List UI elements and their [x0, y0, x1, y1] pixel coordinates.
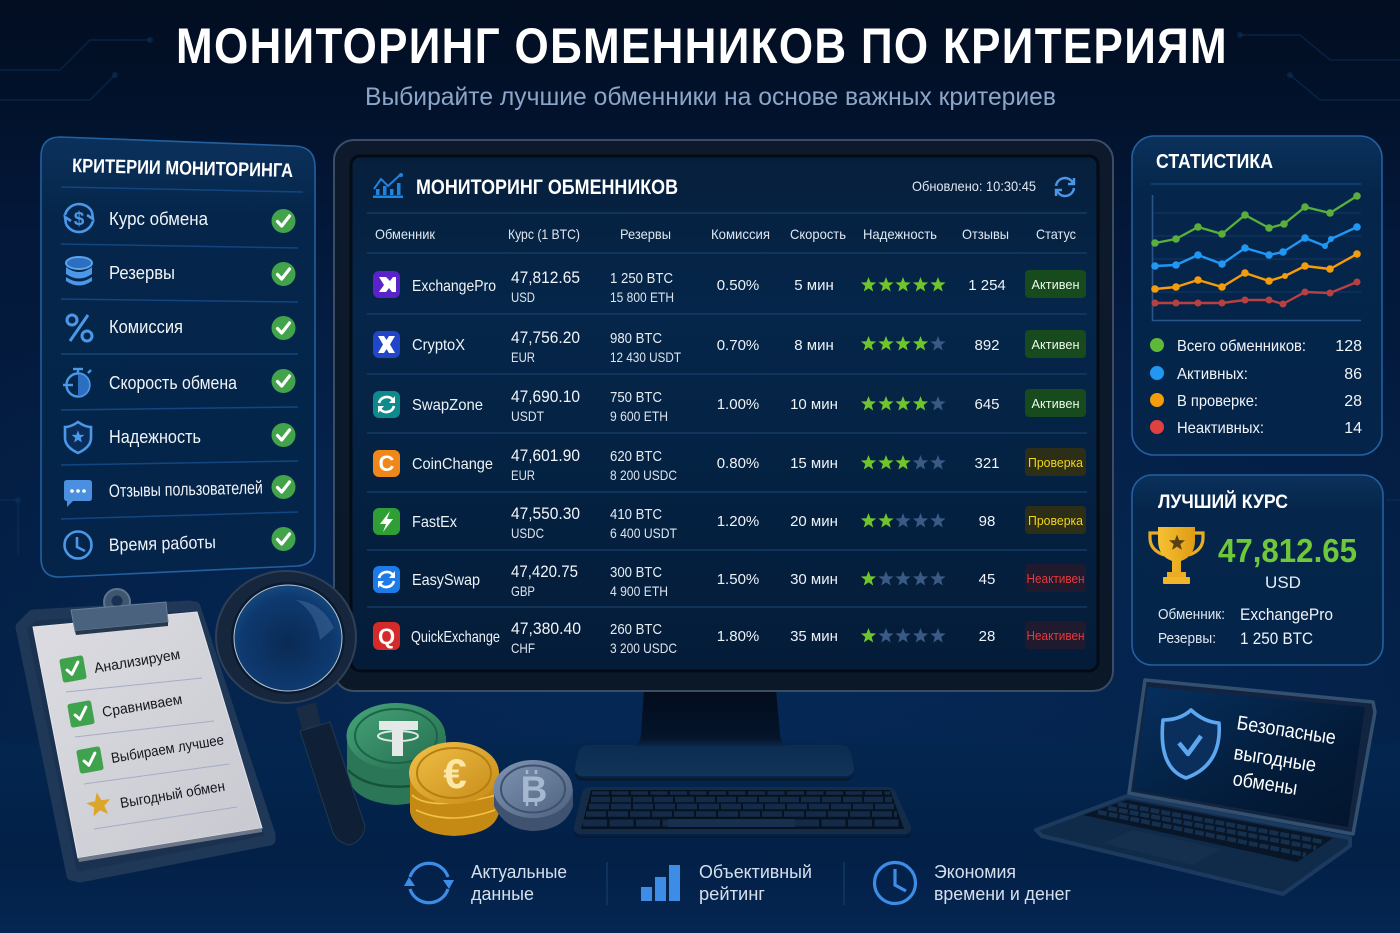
- panel: monitor dashboard: [334, 140, 1113, 691]
- row: QuickExchange: Q: [378, 624, 395, 649]
- footer: saving time and money: времени и денег: [934, 884, 1071, 904]
- heading: best rate: ЛУЧШИЙ КУРС: [1158, 491, 1288, 513]
- coin: bitcoin: B: [521, 769, 547, 810]
- table header: [375, 226, 1076, 242]
- legend: 28: [1344, 393, 1362, 410]
- icon: reserves: [66, 257, 92, 286]
- row: CryptoX: 47,756.20: [511, 328, 580, 347]
- coins: [346, 703, 573, 836]
- table header: Курс (1 BTC): [508, 226, 580, 242]
- row: CoinChange: 8 200 USDC: [610, 467, 677, 483]
- row: CryptoX: 980 BTC: [610, 331, 662, 347]
- row: CryptoX: CryptoX: [412, 337, 465, 354]
- icon: trophy: [1150, 527, 1203, 584]
- magnifying glass: [216, 571, 365, 845]
- text: criteria list: [109, 209, 263, 555]
- row: ExchangePro: ExchangePro: [412, 278, 496, 295]
- checklist: Анализируем: [93, 647, 181, 677]
- footer: saving time and money: Экономия: [934, 862, 1016, 882]
- row: ExchangePro: 1 250 BTC: [610, 271, 673, 287]
- table header: Скорость: [790, 226, 846, 242]
- row: QuickExchange: QuickExchange: [411, 629, 500, 646]
- footer: objective rating: Объективный: [699, 862, 812, 882]
- best rate value: 47,812.65: [1218, 532, 1357, 569]
- icon: clock: [874, 862, 916, 904]
- table header: Статус: [1036, 226, 1076, 242]
- table header: Комиссия: [711, 226, 770, 242]
- row: EasySwap: 1.50%: [717, 571, 759, 588]
- table header: Отзывы: [962, 226, 1009, 242]
- coin: euro: €: [443, 750, 467, 797]
- row: EasySwap: 4 900 ETH: [610, 583, 668, 599]
- row: SwapZone: 750 BTC: [610, 390, 662, 406]
- text: criteria list: Курс обмена: [109, 209, 209, 229]
- best rate details: ExchangePro: [1240, 606, 1333, 624]
- coin: tether: [346, 703, 446, 805]
- icon: refresh arrows: [404, 863, 454, 903]
- best rate details: Резервы:: [1158, 631, 1216, 647]
- row: QuickExchange: 35 мин: [790, 628, 838, 645]
- icon: clock: [64, 532, 92, 558]
- row: CoinChange: C: [379, 451, 395, 476]
- icons: green checks: [272, 209, 296, 551]
- row: QuickExchange: 260 BTC: [610, 622, 662, 638]
- row: EasySwap: 30 мин: [790, 571, 838, 588]
- keyboard: [574, 787, 911, 838]
- row: SwapZone: 9 600 ETH: [610, 408, 668, 424]
- row: ExchangePro: USD: [511, 289, 535, 305]
- row: EasySwap: 47,420.75: [511, 562, 578, 581]
- legend: 86: [1344, 366, 1362, 383]
- row: FastEx: FastEx: [412, 514, 457, 531]
- laptop text: Безопасные: [1235, 712, 1337, 749]
- row: FastEx: 47,550.30: [511, 504, 580, 523]
- row: SwapZone: Активен: [1032, 397, 1080, 411]
- row: EasySwap: GBP: [511, 583, 535, 599]
- row: QuickExchange: Неактивен: [1026, 629, 1085, 643]
- row: SwapZone: 1.00%: [717, 396, 759, 413]
- row: ExchangePro: Активен: [1032, 278, 1080, 292]
- row: CoinChange: Проверка: [1028, 456, 1083, 470]
- checklist: Сравниваем: [101, 692, 184, 721]
- legend: 14: [1344, 420, 1362, 437]
- laptop text: обмены: [1231, 768, 1299, 800]
- best rate details: 1 250 BTC: [1240, 630, 1313, 648]
- clipboard: [21, 589, 270, 877]
- row: CryptoX: Активен: [1032, 338, 1080, 352]
- panel: best rate: [1132, 475, 1383, 665]
- panel: monitoring criteria: [41, 137, 315, 577]
- row: QuickExchange: 1.80%: [717, 628, 759, 645]
- legend: Неактивных:: [1177, 420, 1264, 437]
- row: CryptoX: EUR: [511, 349, 535, 365]
- row: FastEx: 20 мин: [790, 513, 838, 530]
- heading: criteria: КРИТЕРИИ МОНИТОРИНГА: [72, 155, 293, 182]
- text: criteria list: Отзывы пользователей: [109, 478, 263, 501]
- icon: exchange rate: $: [74, 209, 85, 230]
- legend: В проверке:: [1177, 393, 1258, 410]
- line chart: [1151, 192, 1361, 320]
- row: EasySwap: EasySwap: [412, 572, 480, 589]
- row: QuickExchange: 47,380.40: [511, 619, 581, 638]
- row: SwapZone: USDT: [511, 408, 544, 424]
- title: МОНИТОРИНГ ОБМЕННИКОВ ПО КРИТЕРИЯМ: [176, 18, 1228, 74]
- row: FastEx: USDC: [511, 525, 544, 541]
- row: EasySwap: 45: [979, 571, 995, 588]
- laptop text: выгодные: [1232, 742, 1318, 777]
- footer: up-to-date data: [404, 862, 567, 904]
- best rate details: [1158, 606, 1333, 648]
- text: criteria list: Надежность: [109, 427, 201, 447]
- row: CryptoX: 8 мин: [794, 337, 834, 354]
- icon: percent: [67, 315, 92, 341]
- text: criteria list: Резервы: [109, 263, 175, 283]
- row: ExchangePro: 1 254: [968, 277, 1006, 294]
- legend: Всего обменников:: [1177, 338, 1306, 355]
- row: ExchangePro: 5 мин: [794, 277, 834, 294]
- row: ExchangePro: 0.50%: [717, 277, 759, 294]
- row: CoinChange: EUR: [511, 467, 535, 483]
- coin: bitcoin: [494, 760, 573, 831]
- row: ExchangePro: [373, 268, 1086, 305]
- currency: USD: [1265, 573, 1301, 592]
- table header: Надежность: [863, 226, 937, 242]
- heading: statistics: СТАТИСТИКА: [1156, 151, 1273, 173]
- row: SwapZone: [373, 387, 1086, 424]
- row: FastEx: 1.20%: [717, 513, 759, 530]
- row: CryptoX: 12 430 USDT: [610, 349, 681, 365]
- table header: Резервы: [620, 226, 671, 242]
- row: QuickExchange: CHF: [511, 640, 535, 656]
- heading: dashboard: МОНИТОРИНГ ОБМЕННИКОВ: [416, 176, 678, 199]
- row: CoinChange: 0.80%: [717, 455, 759, 472]
- legend: [1150, 338, 1362, 437]
- row: EasySwap: [373, 562, 1086, 599]
- row: ExchangePro: 15 800 ETH: [610, 289, 674, 305]
- row: CoinChange: 321: [974, 455, 1000, 472]
- checklist: Выбираем лучшее: [110, 732, 225, 767]
- row: FastEx: 6 400 USDT: [610, 525, 677, 541]
- row: SwapZone: SwapZone: [412, 397, 483, 414]
- legend: 128: [1335, 338, 1362, 355]
- updated time: Обновлено: 10:30:45: [912, 178, 1036, 194]
- row: CoinChange: 47,601.90: [511, 446, 580, 465]
- row: EasySwap: 300 BTC: [610, 565, 662, 581]
- row: EasySwap: Неактивен: [1026, 572, 1085, 586]
- best rate details: Обменник:: [1158, 607, 1225, 623]
- monitor stand: [575, 690, 854, 781]
- footer: up-to-date data: Актуальные: [471, 862, 567, 882]
- icon: refresh: [1056, 178, 1074, 196]
- coin: euro: [409, 742, 499, 836]
- row: CoinChange: [373, 446, 1086, 483]
- row: CoinChange: CoinChange: [412, 456, 493, 473]
- row: CoinChange: 620 BTC: [610, 449, 662, 465]
- icon: shield check: [1162, 710, 1219, 778]
- footer: saving time and money: [844, 862, 1071, 905]
- row: SwapZone: 47,690.10: [511, 387, 580, 406]
- row: SwapZone: 10 мин: [790, 396, 838, 413]
- icon: bars: [641, 865, 680, 901]
- clip: [71, 589, 168, 635]
- row: CryptoX: [373, 328, 1086, 365]
- icon: chat: [64, 480, 92, 507]
- row: CoinChange: 15 мин: [790, 455, 838, 472]
- icon: exchange rate: [65, 204, 93, 232]
- row: QuickExchange: 28: [979, 628, 995, 645]
- laptop text: [1231, 712, 1337, 800]
- row: QuickExchange: 3 200 USDC: [610, 640, 677, 656]
- legend: Активных:: [1177, 366, 1248, 383]
- panel: statistics: [1132, 136, 1382, 455]
- icon: chart: [373, 173, 403, 198]
- footer: up-to-date data: данные: [471, 884, 534, 904]
- row: FastEx: 410 BTC: [610, 507, 662, 523]
- text: criteria list: Время работы: [109, 532, 216, 555]
- text: criteria list: Скорость обмена: [109, 373, 238, 393]
- checklist: [59, 647, 226, 817]
- footer: objective rating: [607, 862, 812, 905]
- laptop: [1036, 680, 1375, 894]
- row: SwapZone: 645: [974, 396, 1000, 413]
- subtitle: Выбирайте лучшие обменники на основе важных критериев: [365, 83, 1056, 111]
- checklist: Выгодный обмен: [119, 779, 226, 812]
- row: CryptoX: 0.70%: [717, 337, 759, 354]
- row: FastEx: 98: [979, 513, 995, 530]
- text: criteria list: Комиссия: [109, 317, 183, 337]
- row: FastEx: [373, 504, 1086, 541]
- row: ExchangePro: 47,812.65: [511, 268, 580, 287]
- row: FastEx: Проверка: [1028, 514, 1083, 528]
- row: CryptoX: 892: [974, 337, 1000, 354]
- table header: Обменник: [375, 226, 436, 242]
- footer: objective rating: рейтинг: [699, 884, 765, 904]
- icon: shield: [65, 422, 91, 453]
- row: QuickExchange: [373, 619, 1086, 656]
- icon: stopwatch: [63, 369, 91, 396]
